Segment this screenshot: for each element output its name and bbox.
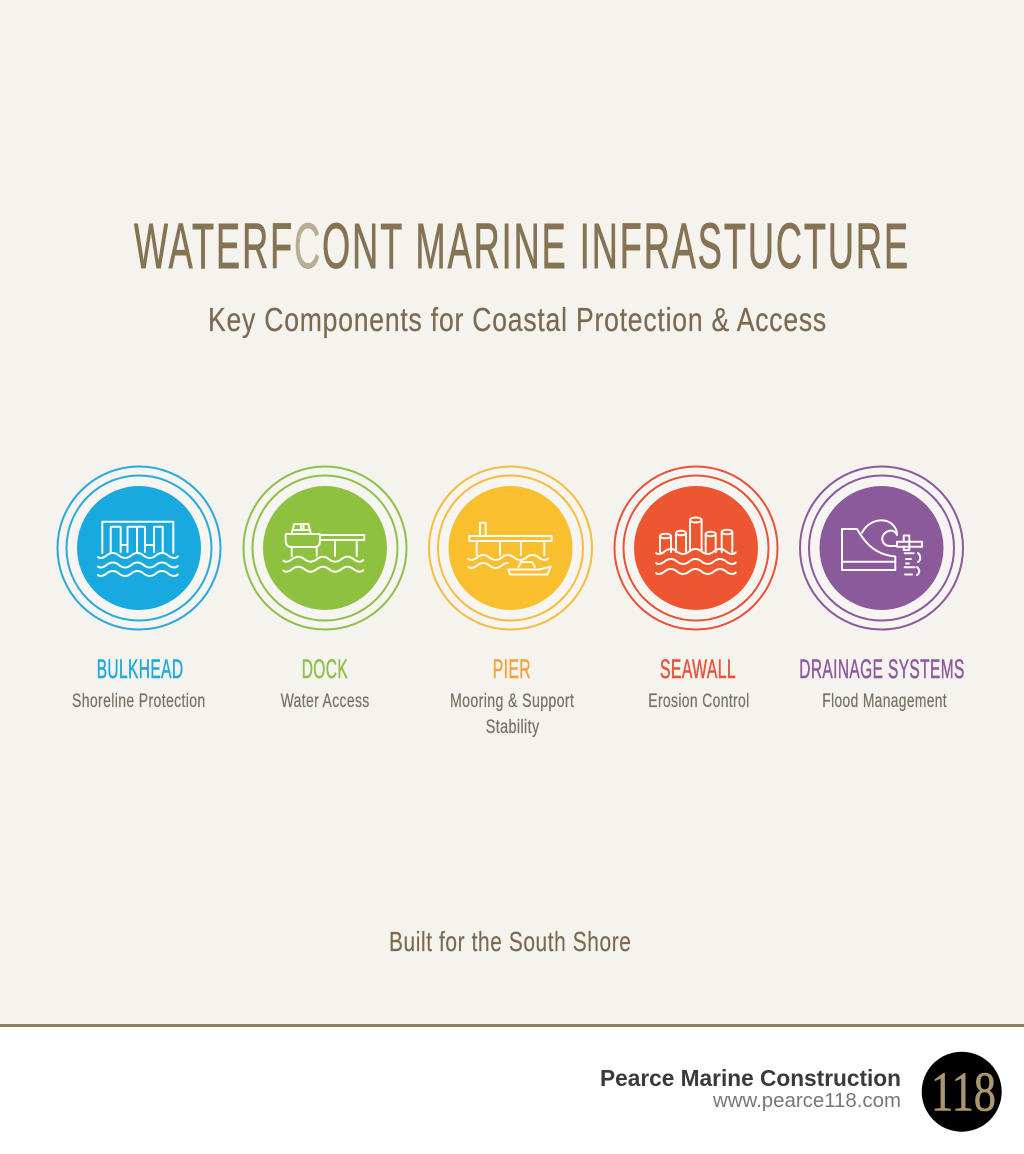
icon: pier with moored boat (468, 523, 552, 574)
caption: drainage systems: Flood Management (822, 690, 947, 712)
badge: drainage circles (800, 466, 963, 630)
logo: 118 (922, 1052, 1002, 1132)
label: pier: PIER (493, 654, 531, 684)
tagline: Built for the South Shore (389, 926, 632, 957)
badge: pier circles (429, 466, 592, 630)
caption: dock: Water Access (281, 690, 370, 712)
icon: seawall pilings and water (656, 518, 736, 574)
company name: Pearce Marine Construction (600, 1065, 901, 1091)
caption: pier: Mooring & Support (450, 690, 574, 712)
caption: seawall: Erosion Control (648, 690, 750, 712)
badge: seawall circles (614, 466, 778, 630)
icon: bulkhead wall and water (98, 522, 178, 576)
logo: 118: 118 (931, 1062, 996, 1124)
panel: seawall (614, 466, 778, 712)
footer (0, 1024, 1024, 1154)
icon: wave against wall with drain (842, 520, 922, 575)
label: seawall: SEAWALL (660, 654, 736, 684)
footer background (0, 1024, 1024, 1154)
panel: bulkhead (58, 466, 220, 712)
icon: dock with boat (284, 524, 364, 572)
label: bulkhead: BULKHEAD (97, 654, 184, 684)
badge: bulkhead circles (58, 466, 220, 630)
panel: dock (244, 466, 406, 712)
label: dock: DOCK (302, 654, 348, 684)
website: www.pearce118.com (712, 1090, 901, 1112)
subtitle: Key Components for Coastal Protection & Access (208, 301, 827, 338)
footer rule (0, 1024, 1024, 1027)
panel: pier (429, 466, 592, 738)
panel: drainage systems (799, 466, 965, 712)
badge: dock circles (244, 466, 406, 630)
caption: pier second line: Stability (486, 716, 540, 738)
caption: bulkhead: Shoreline Protection (72, 690, 206, 712)
